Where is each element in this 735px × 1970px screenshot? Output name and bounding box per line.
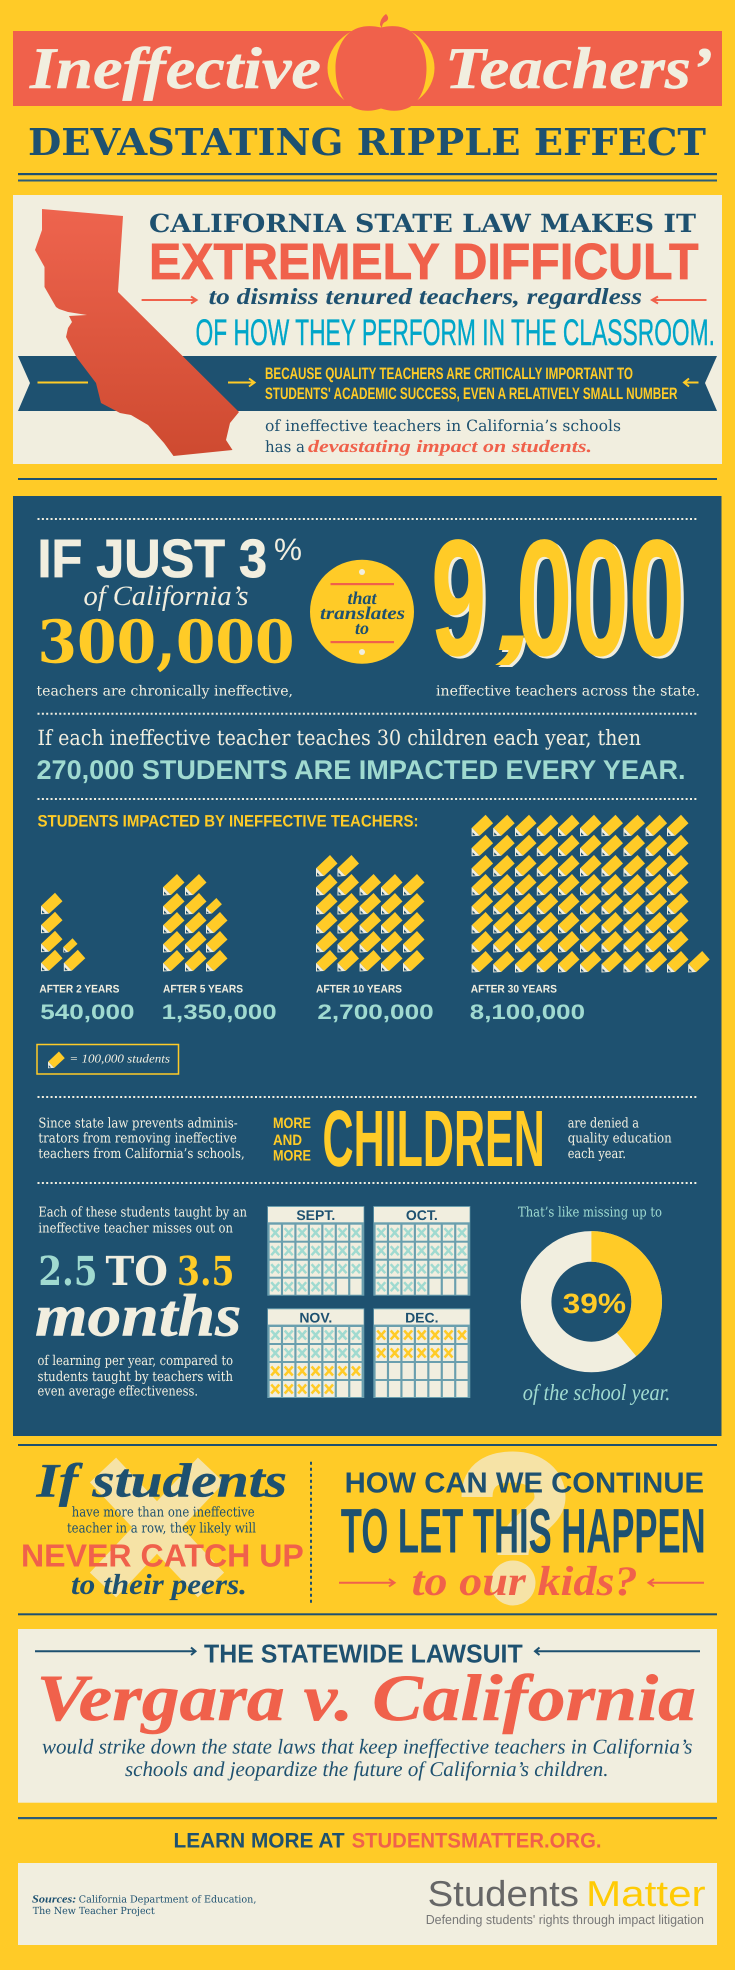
calendar: september: [267, 1206, 364, 1296]
text: are denied: quality education: [568, 1131, 672, 1147]
stat: 2.5 to 3.5 months: [35, 1248, 241, 1349]
text: sources: Sources:: [32, 1894, 76, 1906]
text: would strike down: would strike down the state laws that keep ineffective teachers in California’s: [42, 1734, 692, 1758]
text: has a: has a: [265, 438, 305, 456]
heading: more and more children: [273, 1094, 545, 1183]
stat: 9,000: ,: [483, 562, 551, 671]
calendar: november: NOV.: [299, 1309, 332, 1325]
text: to their peers: to their peers.: [71, 1569, 247, 1601]
panel: never catch up: [21, 1455, 304, 1601]
calendar: december: [373, 1308, 470, 1398]
text: of learning per year: of learning per year, compared to: [38, 1353, 233, 1369]
title banner: [13, 14, 722, 112]
stat: 2.5 to 3.5 months: 3.5: [177, 1248, 234, 1295]
calendar: december: DEC.: [405, 1309, 439, 1325]
text: are denied: [568, 1116, 672, 1162]
calendar: october: [373, 1206, 470, 1296]
heading: statewide lawsuit: THE STATEWIDE LAWSUIT: [204, 1639, 523, 1669]
ribbon lines and arrows: [38, 378, 698, 386]
logo: students matter: Students: [428, 1873, 579, 1914]
donut chart: 39 percent: 39%: [563, 1288, 626, 1319]
legend: = 100,000 students: [69, 1052, 170, 1066]
panel: statistics: [13, 496, 722, 1436]
title: Teachers: Teachers’: [445, 35, 713, 101]
calendar: november: [267, 1308, 364, 1398]
calendar: september: SEPT.: [296, 1207, 335, 1223]
arrow: left to right: [339, 1579, 394, 1586]
text: each of these students: [38, 1205, 247, 1237]
text: since state law: trators from removing ineffective: [38, 1131, 237, 1147]
text: each of these students: Each of these students taught by an: [38, 1205, 247, 1221]
heading: more and more children: MORE: [273, 1148, 311, 1165]
stat: if just 3 percent: teachers are chronically ineffective,: [36, 684, 293, 700]
panel: statewide lawsuit: [18, 1629, 717, 1803]
panel: california law: [13, 195, 722, 464]
text: would strike down: schools and jeopardize the future of California’s children.: [125, 1757, 608, 1781]
chart heading: STUDENTS IMPACTED BY INEFFECTIVE TEACHERS:: [38, 813, 418, 831]
donut chart: 39 percent: [536, 1246, 647, 1357]
arrow: right to left: [652, 296, 706, 304]
text: each of these students: ineffective teacher misses out on: [38, 1221, 233, 1237]
heading: 270,000 students: 270,000 STUDENTS ARE IMPACTED EVERY YEAR.: [36, 755, 686, 785]
text: sources: [32, 1894, 256, 1917]
pictogram: after 2 years: [39, 893, 134, 1024]
text: ineffective teachers across the state: ineffective teachers across the state.: [436, 684, 700, 700]
text: of ineffective teachers: of ineffective teachers in California’s schools: [265, 417, 621, 435]
call to action: LEARN MORE AT: [174, 1829, 345, 1852]
text: to dismiss: to dismiss tenured teachers, regardless: [209, 284, 642, 309]
text: more than one: [67, 1505, 256, 1536]
stat: if just 3 percent: [36, 529, 302, 700]
stat: if just 3 percent: IF JUST 3: [38, 529, 267, 589]
pictogram: after 30 years: 8,100,000: [470, 1001, 585, 1024]
text: of learning per year: [38, 1353, 233, 1400]
text: to our kids: to our kids?: [412, 1559, 638, 1605]
text: since state law: [38, 1116, 245, 1162]
logo: students matter: Matter: [586, 1873, 706, 1914]
arrow: right to left: [648, 1579, 704, 1586]
panel: footer: [18, 1863, 717, 1945]
text: sources: California Department of Education,: [79, 1895, 256, 1906]
text: devastating impact: devastating impact on students.: [308, 436, 592, 456]
pictogram: after 2 years: 540,000: [40, 1001, 134, 1024]
pictogram: after 2 years: AFTER 2 YEARS: [39, 984, 119, 996]
arrow: left: [35, 1648, 196, 1655]
logo: students matter: [426, 1873, 706, 1927]
text: are denied: are denied a: [568, 1116, 639, 1132]
icon: pale X: [103, 1470, 211, 1585]
call to action: STUDENTSMATTER.ORG.: [352, 1829, 602, 1852]
calendar: october: OCT.: [406, 1207, 438, 1223]
pictogram: after 30 years: AFTER 30 YEARS: [471, 984, 557, 996]
pictogram: after 10 years: AFTER 10 YEARS: [316, 984, 402, 996]
stat: if just 3 percent: 300,000: [38, 608, 294, 677]
arrow: left to right: [142, 296, 196, 304]
badge: that translates to: that: [347, 588, 378, 608]
stat: if just 3 percent: %: [274, 532, 302, 567]
icon: pale question mark: [477, 1467, 550, 1606]
call to action: [174, 1829, 602, 1852]
title: Ineffective: Ineffective: [29, 35, 321, 101]
text: are denied: each year.: [568, 1146, 626, 1162]
text: more than one: have more than one ineffective: [72, 1505, 255, 1521]
ribbon: [18, 356, 717, 411]
pictogram: after 5 years: 1,350,000: [162, 1001, 277, 1024]
pictogram: after 30 years: [470, 815, 710, 1024]
text: missing up to: That’s like missing up to: [518, 1205, 662, 1221]
pictogram: after 5 years: [162, 874, 277, 1024]
text: of learning per year: even average effectiveness.: [38, 1384, 198, 1400]
heading: vergara v california: Vergara v. California: [37, 1662, 696, 1735]
text: more than one: teacher in a row, they likely will: [67, 1520, 256, 1536]
heading: extremely difficult: EXTREMELY DIFFICULT: [149, 233, 698, 290]
logo: students matter: Defending students' rights through impact litigation: [426, 1912, 704, 1927]
text: since state law: teachers from California’s schools,: [38, 1146, 245, 1162]
heading: more and more children: AND: [273, 1132, 302, 1149]
stat: 9,000: [431, 506, 685, 691]
text: of the school year: of the school year.: [523, 1380, 670, 1405]
stat: if just 3 percent: of California’s: [84, 581, 249, 612]
pictogram: after 5 years: AFTER 5 YEARS: [163, 984, 243, 996]
badge: that translates to: [310, 560, 414, 664]
text: would strike down: [42, 1734, 692, 1781]
text: since state law: Since state law prevents adminis-: [38, 1116, 238, 1132]
stat: 9,000: 9: [431, 506, 486, 691]
text: if students: If students: [35, 1455, 287, 1508]
arrow: right: [535, 1648, 700, 1655]
subtitle: DEVASTATING RIPPLE EFFECT: [28, 120, 706, 164]
pictogram: after 10 years: [316, 855, 434, 1024]
stat: 2.5 to 3.5 months: 2.5: [38, 1248, 98, 1295]
text: if each ineffective teacher: If each ineffective teacher teaches 30 children each year, then: [38, 726, 641, 750]
icon: apple: [328, 14, 434, 112]
panel: how can we continue: [339, 1467, 706, 1606]
text: sources: The New Teacher Project: [33, 1906, 155, 1917]
icon: california map: [35, 209, 239, 456]
badge: that translates to: translates: [320, 603, 405, 623]
heading: how can we continue: HOW CAN WE CONTINUE: [345, 1467, 704, 1499]
heading: never catch up: NEVER CATCH UP: [21, 1538, 304, 1574]
pictogram: after 10 years: 2,700,000: [317, 1001, 434, 1024]
badge: that translates to: to: [355, 618, 369, 638]
heading: state law: CALIFORNIA STATE LAW MAKES IT: [149, 209, 696, 238]
stat: 2.5 to 3.5 months: months: [35, 1283, 241, 1349]
stat: 2.5 to 3.5 months: TO: [106, 1248, 168, 1295]
legend: [37, 1044, 178, 1074]
stat: 9,000: 000: [516, 506, 685, 691]
heading: more and more children: CHILDREN: [322, 1094, 545, 1183]
text: of learning per year: students taught by teachers with: [38, 1369, 233, 1385]
heading: more and more children: MORE: [273, 1115, 311, 1132]
